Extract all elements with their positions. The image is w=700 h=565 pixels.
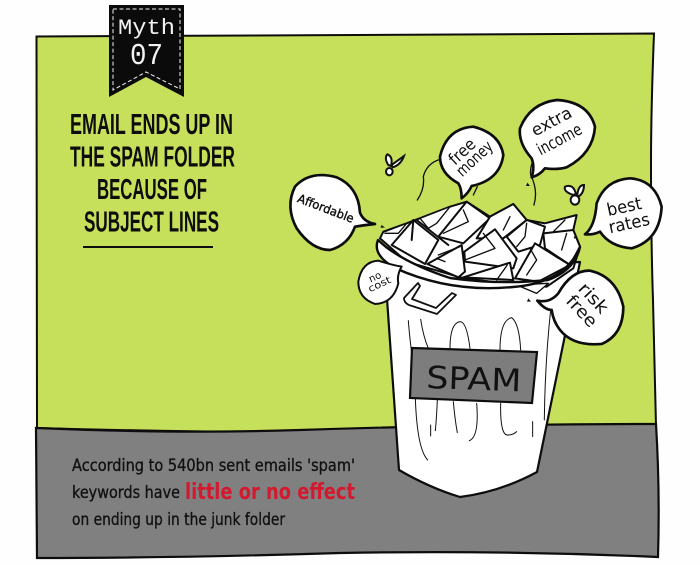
ribbon badge: Myth 07: [109, 5, 184, 97]
heading underline: [83, 246, 213, 248]
heading: EMAIL ENDS UP IN: [70, 109, 233, 141]
fly: left: [386, 154, 404, 175]
heading: SUBJECT LINES: [84, 206, 219, 238]
panel: green background: [36, 34, 656, 433]
bubble: free money: money: [452, 137, 497, 180]
caption: According to 540bn sent emails 'spam': [72, 456, 355, 476]
bubble: free money: [440, 127, 503, 198]
bin streaks: [408, 310, 551, 460]
bubble: Affordable: [290, 175, 375, 250]
panel: grey floor: [36, 424, 659, 558]
label: SPAM: SPAM: [426, 360, 522, 399]
bubble: free money: free: [445, 135, 480, 169]
caption: on ending up in the junk folder: [72, 510, 285, 530]
illustration: spam bin: [377, 202, 580, 497]
fly: right: [565, 185, 584, 205]
heading: BECAUSE OF: [97, 174, 207, 206]
bubble: risk free: risk: [574, 279, 612, 318]
bubble: risk free: free: [561, 291, 601, 332]
heading: [70, 109, 235, 238]
bubble: best rates: rates: [607, 210, 652, 238]
specks: [380, 183, 578, 302]
bin handle: [404, 283, 456, 314]
bubble: Affordable: Affordable: [296, 191, 356, 226]
bin body: [385, 262, 580, 497]
ribbon badge: Myth 07: 07: [130, 39, 163, 74]
caption: [72, 456, 355, 530]
bubble: no cost: no: [367, 270, 383, 285]
ribbon badge: Myth 07: Myth: [118, 16, 175, 41]
envelopes: [380, 202, 580, 293]
label: SPAM: [410, 348, 537, 403]
bubble: extra income: income: [534, 120, 585, 159]
bubble: no cost: cost: [367, 275, 393, 295]
speech bubbles and flies: [290, 100, 662, 344]
caption highlight: little or no effect: [185, 480, 355, 505]
bubble: extra income: extra: [528, 103, 575, 140]
caption: keywords have: [72, 483, 180, 503]
bubble: best rates: best: [605, 194, 644, 221]
bubble: no cost: [358, 261, 402, 304]
bubble: risk free: [537, 271, 623, 344]
fly trails: [417, 159, 536, 205]
heading: THE SPAM FOLDER: [70, 142, 235, 174]
bubble: extra income: [520, 100, 595, 177]
bin rim: [377, 240, 580, 288]
bubble: best rates: [585, 178, 662, 248]
